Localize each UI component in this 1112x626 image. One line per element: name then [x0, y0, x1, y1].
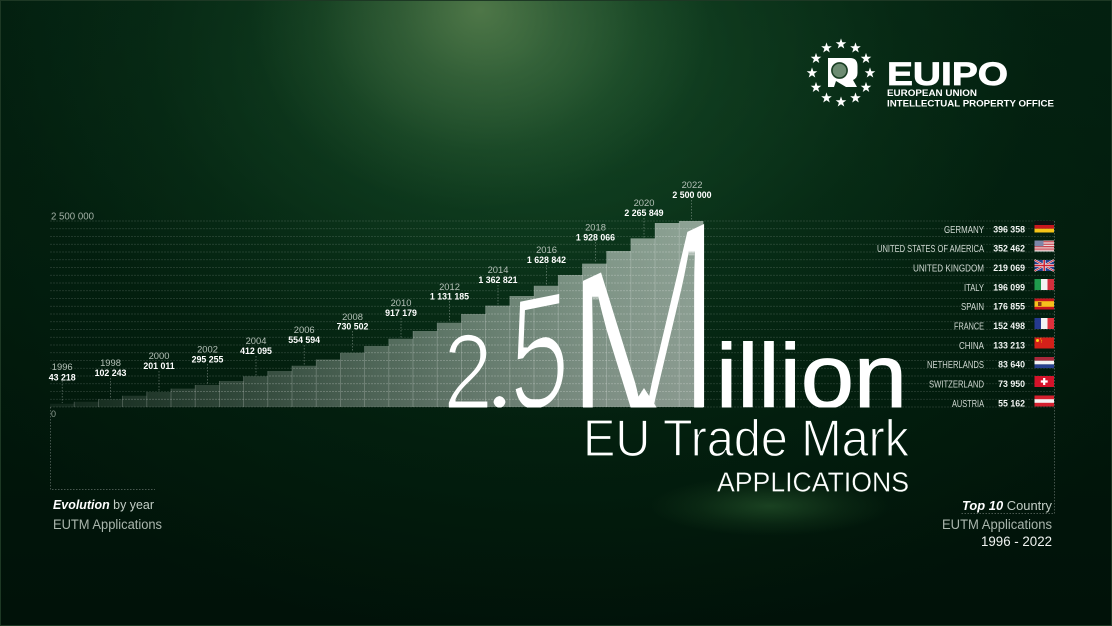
- caption: evolution by year: Evolution by year: [53, 497, 155, 512]
- caption: evolution by year: [53, 497, 162, 532]
- country names: [877, 225, 984, 410]
- year labels: 2006: [294, 324, 315, 335]
- country values: 73 950: [998, 379, 1025, 389]
- year labels: 2000: [149, 350, 169, 361]
- year labels: 2008: [342, 311, 363, 322]
- caption: top 10 country: EUTM Applications: [942, 517, 1052, 532]
- year values: 917 179: [385, 308, 417, 318]
- headline letters illion: illion: [716, 327, 907, 427]
- country names: NETHERLANDS: [927, 360, 984, 371]
- country names: SPAIN: [961, 302, 984, 313]
- country names: CHINA: [959, 341, 984, 352]
- chart: cumulative applications by year: [49, 179, 1054, 514]
- year values: 1 131 185: [430, 292, 469, 302]
- flag: Austria: [1034, 396, 1054, 406]
- country names: GERMANY: [944, 225, 984, 236]
- logo subtitle: INTELLECTUAL PROPERTY OFFICE: [887, 98, 1054, 108]
- flag: Italy: [1034, 279, 1054, 290]
- flag: Switzerland: [1034, 376, 1054, 387]
- country names: UNITED KINGDOM: [913, 264, 984, 274]
- year values: [49, 190, 712, 382]
- subtitle: APPLICATIONS: APPLICATIONS: [717, 466, 909, 498]
- year values: 295 255: [192, 354, 223, 364]
- country names: ITALY: [964, 283, 984, 294]
- headline number 2 and point: [448, 334, 506, 408]
- headline letter M: M: [564, 156, 723, 532]
- year values: 554 594: [288, 335, 320, 345]
- country values: 133 213: [993, 340, 1025, 350]
- country values: 83 640: [998, 360, 1025, 370]
- year labels: 1996: [52, 361, 73, 372]
- year labels: 2016: [536, 244, 557, 255]
- flag: China: [1034, 338, 1054, 348]
- year values: 2 500 000: [672, 190, 712, 200]
- year labels: 2022: [682, 179, 702, 190]
- year values: 1 628 842: [527, 255, 566, 265]
- chart bars: [50, 221, 703, 407]
- year values: 1 362 821: [478, 275, 518, 285]
- year labels: 2010: [391, 297, 411, 308]
- country values: 176 855: [993, 302, 1025, 312]
- country names: UNITED STATES OF AMERICA: [877, 244, 984, 255]
- flag: France: [1034, 318, 1054, 329]
- country values: 196 099: [993, 282, 1025, 292]
- year labels: 2012: [439, 281, 460, 292]
- flag: USA: [1034, 240, 1054, 252]
- year labels: 2020: [634, 197, 654, 208]
- leader lines: [62, 200, 691, 403]
- year values: 201 011: [143, 361, 175, 371]
- subtitle: EU Trade Mark: EU Trade Mark: [583, 410, 910, 468]
- year labels: 1998: [100, 357, 121, 368]
- flag: Spain: [1034, 298, 1054, 310]
- headline number 2 and point: 2: [443, 312, 493, 431]
- caption: top 10 country: [942, 498, 1052, 549]
- icon: ring of stars: [807, 38, 875, 107]
- letter M vertex join: [638, 388, 657, 408]
- logo subtitle: [887, 87, 1054, 108]
- chart grid: [50, 221, 1054, 407]
- year values: 102 243: [95, 368, 126, 378]
- axis frames: [50, 221, 1054, 514]
- flag: United Kingdom: [1034, 260, 1054, 271]
- flag: Netherlands: [1034, 357, 1054, 368]
- year labels: 2018: [585, 222, 606, 232]
- caption: evolution by year: EUTM Applications: [53, 517, 162, 532]
- year labels: [52, 179, 702, 372]
- country values: 396 358: [993, 224, 1025, 234]
- caption: top 10 country: 1996 - 2022: [981, 534, 1052, 549]
- logo wordmark: EUIPO: [887, 56, 1008, 92]
- headline number 5: 5: [509, 255, 570, 449]
- logo subtitle: EUROPEAN UNION: [887, 87, 977, 98]
- caption: top 10 country: Top 10 Country: [962, 498, 1052, 513]
- flag: Germany: [1034, 221, 1054, 232]
- year values: 730 502: [337, 322, 368, 332]
- country names: SWITZERLAND: [929, 380, 984, 390]
- icon: R trade mark emblem: [828, 58, 858, 87]
- year values: 412 095: [240, 346, 272, 356]
- country names: AUSTRIA: [952, 399, 984, 410]
- country values: 152 498: [993, 321, 1025, 331]
- country values: 219 069: [993, 263, 1025, 273]
- headline: 2.5 Million: [448, 224, 902, 408]
- year values: 2 265 849: [624, 208, 664, 218]
- year labels: 2004: [246, 335, 266, 346]
- top 10 country table: [877, 221, 1054, 410]
- country values: 55 162: [998, 398, 1025, 408]
- axis label: maximum: 2 500 000: [51, 212, 94, 222]
- year labels: 2002: [197, 344, 218, 354]
- year labels: 2014: [488, 264, 508, 275]
- country names: FRANCE: [954, 322, 984, 332]
- axis label: zero: 0: [51, 409, 56, 419]
- year values: 1 928 066: [576, 232, 615, 242]
- country values: [993, 224, 1025, 408]
- year values: 43 218: [49, 372, 76, 382]
- logo: EUIPO: [807, 38, 1054, 108]
- country values: 352 462: [993, 244, 1025, 254]
